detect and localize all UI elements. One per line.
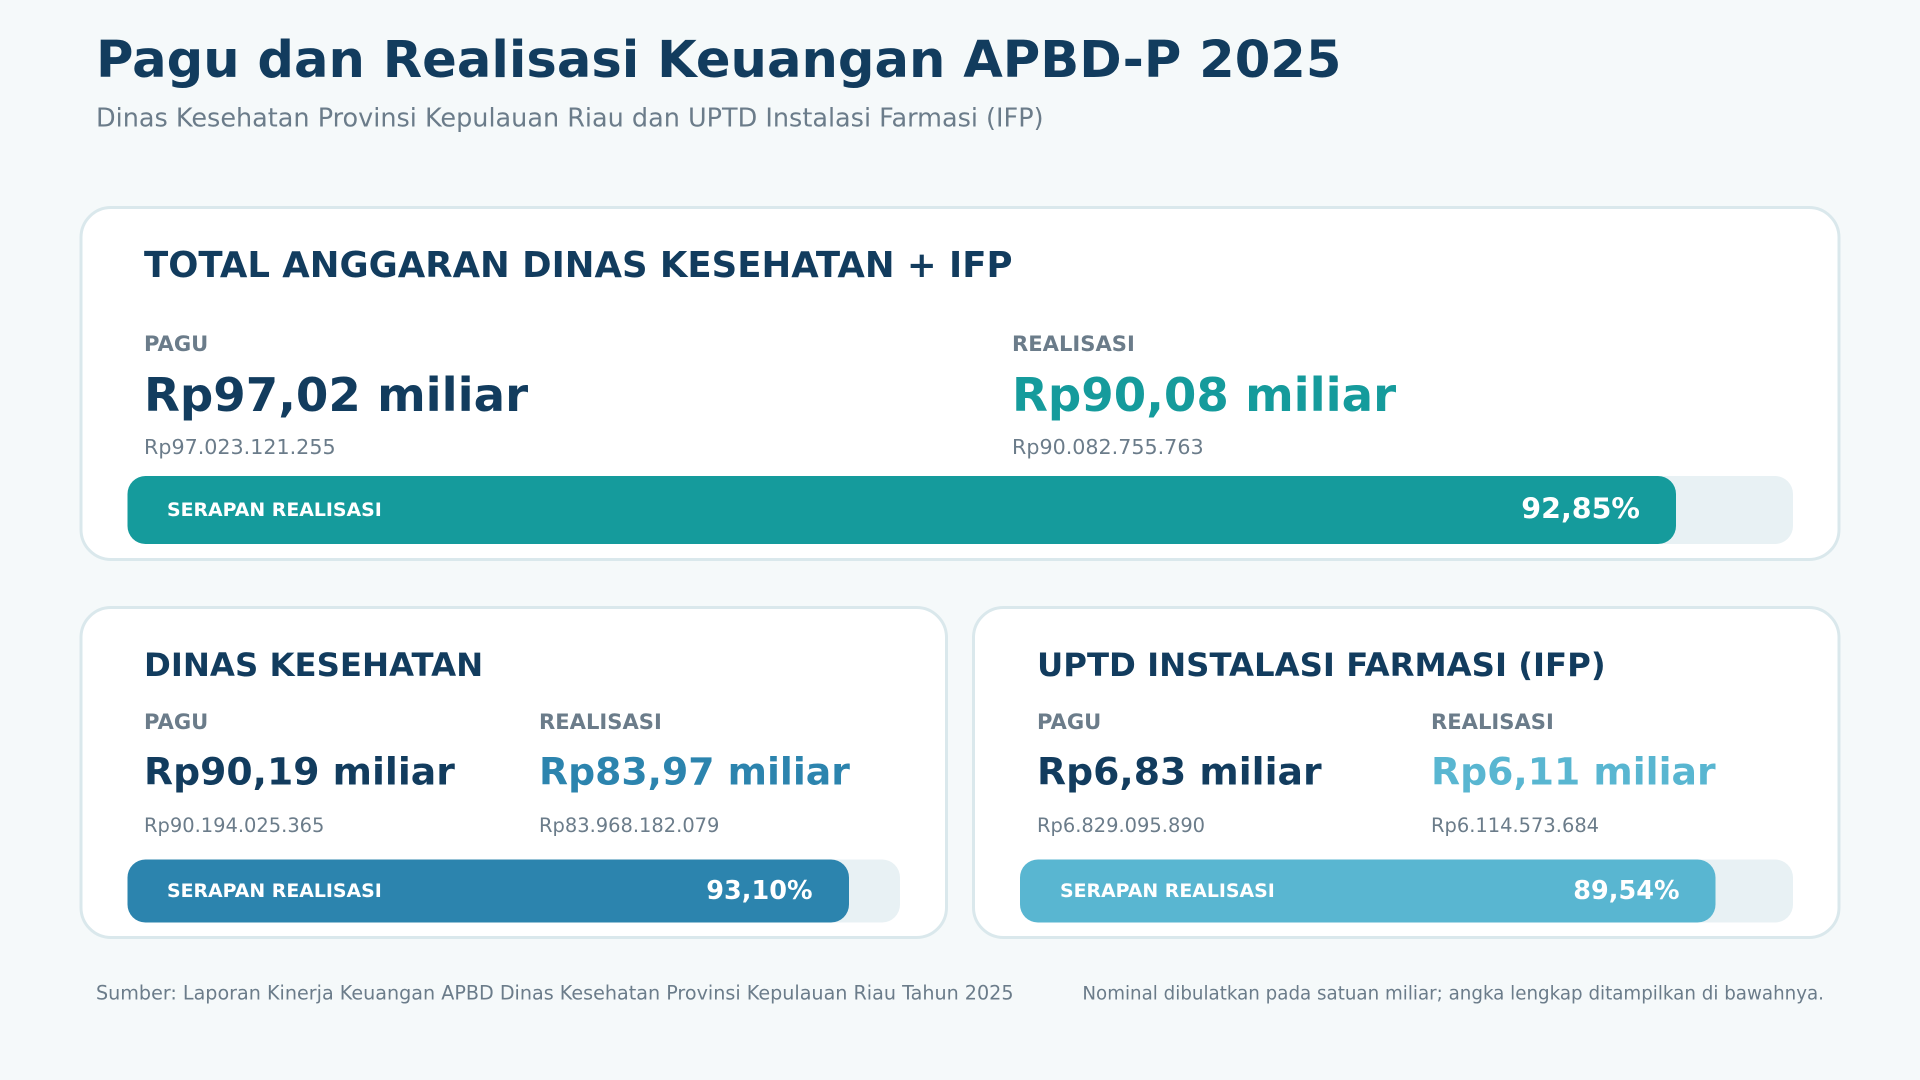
heading: dinas kesehatan: DINAS KESEHATAN xyxy=(144,646,483,684)
realisasi dinas: REALISASI xyxy=(539,709,662,734)
pagu total: Rp97,02 miliar xyxy=(144,369,528,423)
pagu total xyxy=(144,331,528,459)
progress bar: dinas 93,10%: SERAPAN REALISASI xyxy=(167,880,382,902)
heading: uptd ifp: UPTD INSTALASI FARMASI (IFP) xyxy=(1037,646,1606,684)
progress bar: total 92,85%: 92,85% xyxy=(1521,492,1640,526)
title: Pagu dan Realisasi Keuangan APBD-P 2025 xyxy=(96,31,1341,90)
realisasi dinas: Rp83.968.182.079 xyxy=(539,814,719,837)
pagu ifp: Rp6,83 miliar xyxy=(1037,750,1322,794)
realisasi dinas xyxy=(539,709,850,837)
progress bar: total 92,85%: SERAPAN REALISASI xyxy=(167,499,382,521)
progress bar: dinas 93,10% xyxy=(128,860,900,922)
footer: source: Sumber: Laporan Kinerja Keuangan APBD Dinas Kesehatan Provinsi Kepulauan Riau Tahun 2025 xyxy=(96,982,1014,1004)
realisasi ifp: Rp6,11 miliar xyxy=(1431,750,1716,794)
realisasi total: Rp90,08 miliar xyxy=(1012,369,1396,423)
subtitle: Dinas Kesehatan Provinsi Kepulauan Riau dan UPTD Instalasi Farmasi (IFP) xyxy=(96,104,1044,134)
progress bar: ifp 89,54%: SERAPAN REALISASI xyxy=(1060,880,1275,902)
pagu dinas: Rp90,19 miliar xyxy=(144,750,455,794)
pagu ifp xyxy=(1037,709,1322,837)
realisasi dinas: Rp83,97 miliar xyxy=(539,750,850,794)
panel: uptd ifp xyxy=(974,608,1839,938)
panel: total anggaran xyxy=(81,208,1839,560)
progress bar: dinas 93,10%: 93,10% xyxy=(706,876,812,906)
progress bar: ifp 89,54% xyxy=(1020,860,1793,922)
panel: dinas kesehatan xyxy=(81,608,946,938)
heading: total anggaran: TOTAL ANGGARAN DINAS KESEHATAN + IFP xyxy=(144,245,1013,286)
pagu ifp: PAGU xyxy=(1037,709,1101,734)
realisasi ifp xyxy=(1431,709,1716,837)
pagu dinas xyxy=(144,709,455,837)
realisasi ifp: Rp6.114.573.684 xyxy=(1431,814,1599,837)
pagu ifp: Rp6.829.095.890 xyxy=(1037,814,1205,837)
realisasi total: Rp90.082.755.763 xyxy=(1012,435,1204,459)
realisasi ifp: REALISASI xyxy=(1431,709,1554,734)
pagu total: PAGU xyxy=(144,331,208,356)
pagu total: Rp97.023.121.255 xyxy=(144,435,336,459)
pagu dinas: Rp90.194.025.365 xyxy=(144,814,324,837)
progress bar: ifp 89,54%: 89,54% xyxy=(1573,876,1680,906)
realisasi total: REALISASI xyxy=(1012,331,1135,356)
footer: note: Nominal dibulatkan pada satuan miliar; angka lengkap ditampilkan di bawahnya. xyxy=(1082,984,1824,1004)
realisasi total xyxy=(1012,331,1396,459)
progress bar: total 92,85% xyxy=(128,476,1793,544)
pagu dinas: PAGU xyxy=(144,709,208,734)
